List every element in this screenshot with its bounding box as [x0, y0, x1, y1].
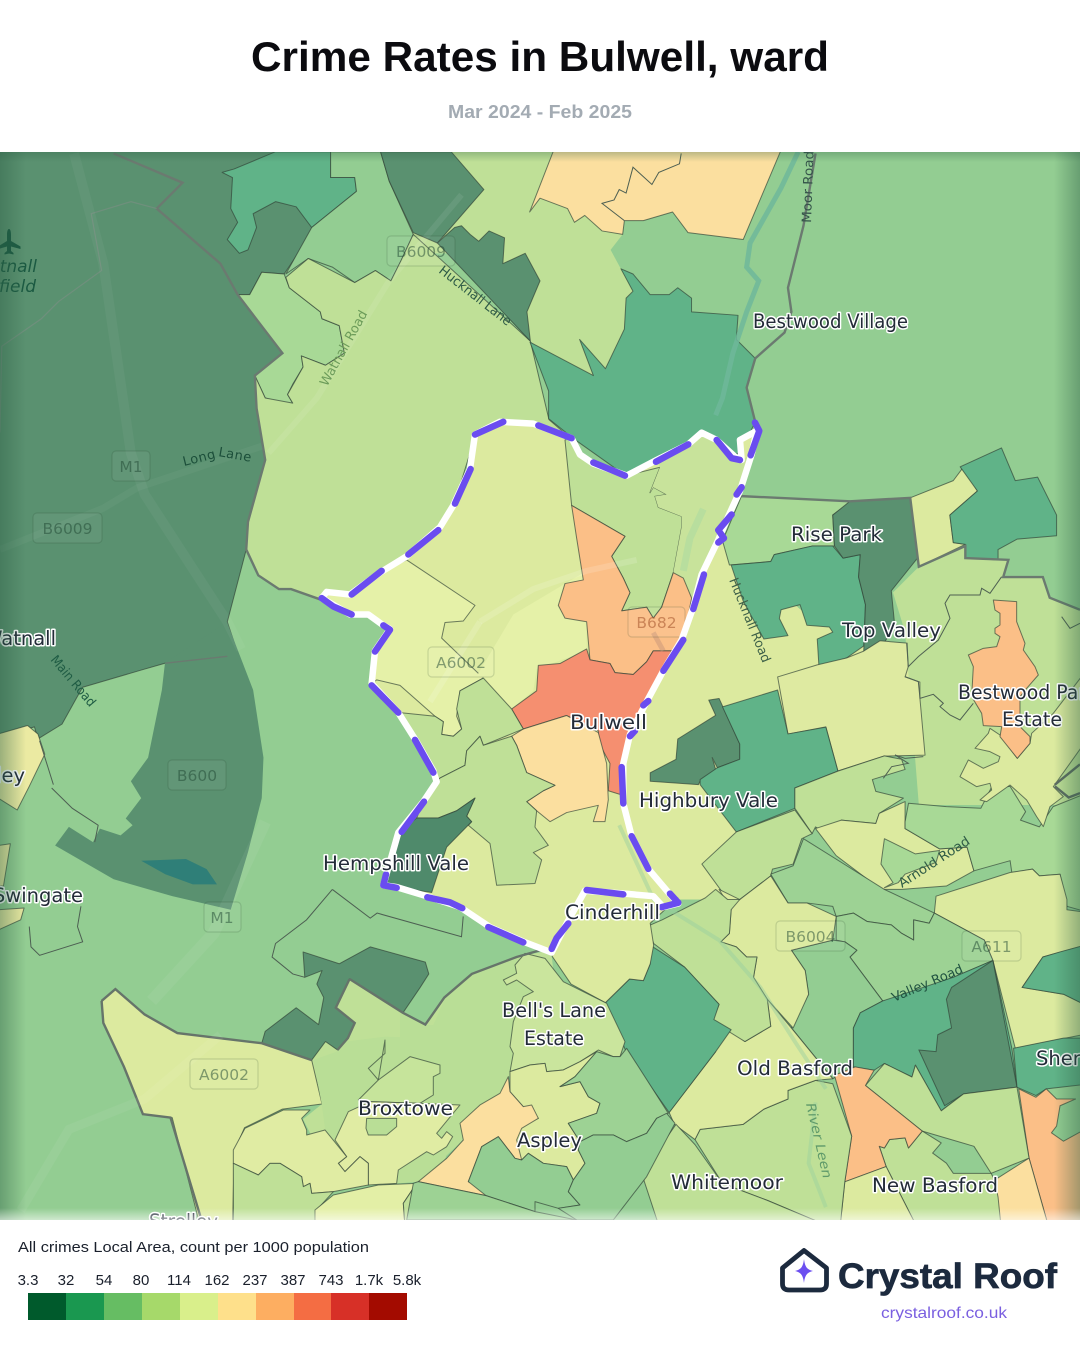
icon: airfield plane — [0, 229, 20, 254]
choropleth areas: south west — [102, 950, 565, 1231]
place: Strelley (clipped): Strelley — [149, 1210, 218, 1233]
shield: A6002 south — [190, 1059, 258, 1089]
shield: M1 north — [112, 451, 150, 481]
legend tick labels: 162 — [204, 1272, 230, 1289]
shield: B600: B600 — [177, 767, 217, 785]
title: Crime Rates in Bulwell, ward — [251, 33, 829, 80]
road label: Main Road: Main Road — [47, 653, 98, 710]
shield: M1 south — [204, 902, 241, 932]
admin borders and rivers — [0, 152, 1080, 1220]
shield: A611 — [962, 931, 1021, 961]
legend tick labels: 54 — [96, 1272, 112, 1289]
road label: Watnall Road: Watnall Road — [317, 308, 371, 389]
shield: M1 north: M1 — [119, 458, 143, 476]
shield: B6004: B6004 — [785, 928, 836, 946]
south east river and borders — [619, 764, 1080, 1207]
shield: B6004 — [776, 921, 845, 951]
road and river names — [47, 151, 973, 1180]
legend tick labels — [18, 1272, 422, 1289]
road label: Hucknall Lane: Hucknall Lane — [436, 263, 514, 329]
shield: B6009 west: B6009 — [42, 520, 93, 538]
legend tick labels: 80 — [133, 1272, 149, 1289]
place: Cinderhill: Cinderhill — [565, 901, 660, 924]
choropleth areas: Rise Park and Top Valley — [723, 448, 1080, 805]
choropleth areas: Broxtowe — [232, 1040, 463, 1220]
choropleth area: Strelley dark zone — [262, 947, 429, 1060]
Bulwell ward boundary — [322, 422, 759, 953]
road label: Hucknall Road: Hucknall Road — [725, 576, 773, 665]
shield: A611: A611 — [971, 938, 1012, 956]
shield: B682: B682 — [636, 614, 677, 632]
place: Bestwood Village: Bestwood Village — [753, 310, 908, 333]
logo wordmark: Crystal Roof — [838, 1257, 1057, 1296]
place: Bell's Lane Estate: Bell's Lane — [502, 999, 606, 1022]
map edge vignette — [0, 152, 1080, 1220]
choropleth areas: Aspley — [407, 1048, 675, 1220]
place: Bell's Lane Estate: Estate — [524, 1027, 584, 1050]
choropleth areas: north dark blobs — [381, 152, 540, 341]
choropleth areas: Bestwood Park Estate — [883, 577, 1080, 827]
NW borders — [0, 153, 461, 663]
boundary base: white line — [322, 422, 757, 953]
legend tick labels: 32 — [58, 1272, 74, 1289]
legend — [18, 1239, 422, 1320]
place: Hempshill Vale: Hempshill Vale — [323, 852, 469, 875]
shield: B6009 north — [387, 236, 455, 266]
subtitle: date range: Mar 2024 - Feb 2025 — [448, 102, 632, 122]
place: Highbury Vale: Highbury Vale — [639, 789, 778, 812]
choropleth areas: south east — [550, 690, 1080, 1231]
road label: Moor Road: Moor Road — [800, 151, 818, 223]
choropleth areas: inside Bulwell ward — [322, 422, 757, 953]
place: New Basford: New Basford — [872, 1174, 998, 1197]
place: Top Valley: Top Valley — [841, 619, 941, 642]
legend tick labels: 387 — [280, 1272, 306, 1289]
place names — [0, 310, 1080, 1233]
place: Old Basford: Old Basford — [737, 1057, 853, 1080]
river label: River Leen: River Leen — [802, 1102, 834, 1180]
logo: Crystal Roof — [782, 1250, 1057, 1322]
place: Aspley: Aspley — [517, 1129, 582, 1152]
place: Bestwood Park Estate: Estate — [1002, 708, 1062, 731]
south west borders — [21, 741, 540, 1220]
road label: Long Lane: Long — [181, 447, 217, 470]
legend tick labels: 5.8k — [393, 1272, 422, 1289]
icon: house with star — [782, 1250, 826, 1290]
place: Whitemoor: Whitemoor — [671, 1171, 784, 1194]
place: Bulwell: Bulwell — [570, 711, 647, 734]
road label: Arnold Road: Arnold Road — [896, 834, 973, 891]
place: Broxtowe: Broxtowe — [358, 1097, 453, 1120]
water body — [141, 859, 217, 884]
label: Watnall Airfield — [0, 259, 37, 292]
legend tick labels: 237 — [242, 1272, 268, 1289]
shield: M1 south: M1 — [210, 909, 234, 927]
legend tick labels: 3.3 — [18, 1272, 38, 1289]
road shields — [33, 236, 1021, 1089]
shield: B6009 north: B6009 — [396, 243, 446, 261]
logo url: crystalroof.co.uk — [881, 1305, 1008, 1322]
place: Bestwood Park Estate — [958, 681, 1080, 731]
choropleth areas: Bell's Lane base — [400, 953, 625, 1183]
ward interior roads — [430, 509, 703, 702]
legend title: All crimes Local Area, count per 1000 population — [18, 1239, 369, 1256]
shield: A6002 south: A6002 — [199, 1066, 249, 1084]
place: Bell's Lane Estate — [502, 999, 606, 1050]
road label: Long Lane second word: Lane — [217, 445, 252, 466]
choropleth areas: north centre — [519, 150, 781, 477]
shield: B682 — [628, 607, 685, 637]
shield: A6002 ward: A6002 — [436, 654, 486, 672]
choropleth areas: north west — [0, 148, 585, 739]
road label: Valley Road: Valley Road — [890, 962, 966, 1006]
choropleth areas: B600 dark zone and west — [0, 622, 263, 930]
legend tick labels: 1.7k — [355, 1272, 384, 1289]
north centre borders — [602, 152, 1080, 610]
legend colour scale — [28, 1293, 407, 1320]
legend tick labels: 743 — [318, 1272, 344, 1289]
legend tick labels: 114 — [167, 1272, 191, 1289]
place: Rise Park: Rise Park — [791, 523, 883, 546]
boundary dashes: purple — [322, 422, 759, 949]
shield: B600 — [168, 760, 226, 790]
shield: B6009 west — [33, 513, 102, 543]
shield: A6002 ward — [428, 647, 494, 677]
choropleth area: east base — [623, 540, 924, 900]
